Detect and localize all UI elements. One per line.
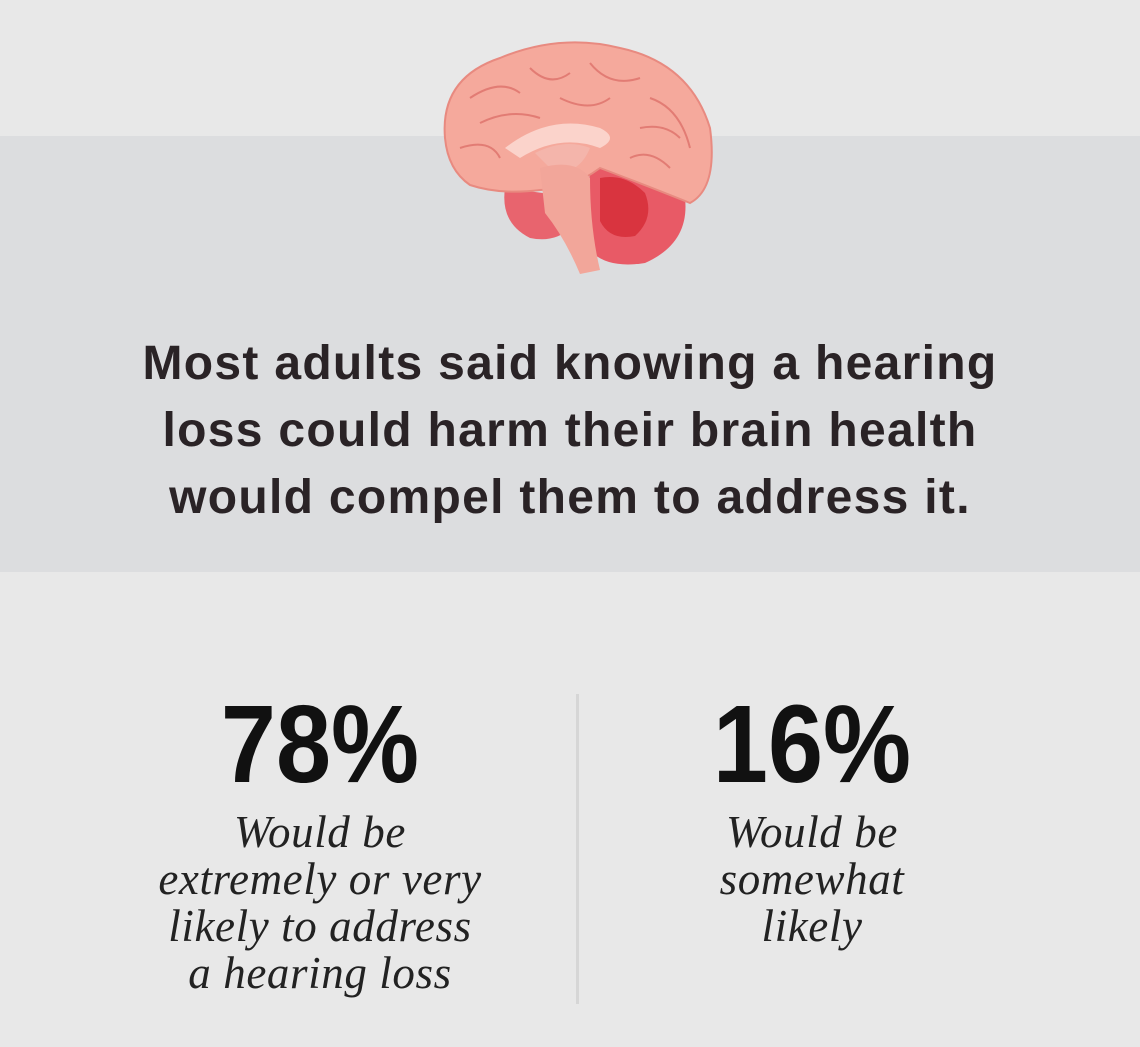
title [142,337,997,524]
icon: brain [444,41,713,274]
divider [576,694,579,1004]
text: 78% description: Would be [234,807,406,857]
text: 16% description: Would be [726,807,898,857]
stat: 16%: 16% [713,683,911,806]
stat: 78%: 78% [221,683,419,806]
title: loss could harm their brain health [162,404,978,457]
cerebellum [504,166,686,264]
text: 78% description: a hearing loss [188,948,452,998]
text: 16% description [720,807,905,951]
text: 16% description: somewhat [720,854,904,904]
text: 16% description: likely [761,901,863,951]
title: Most adults said knowing a hearing [142,337,997,390]
brainstem [540,165,600,274]
text: 78% description: likely to address [168,901,472,951]
text: 78% description: extremely or very [158,854,482,904]
text: 78% description [158,807,482,998]
cerebrum [445,42,712,203]
title: would compel them to address it. [169,471,971,524]
